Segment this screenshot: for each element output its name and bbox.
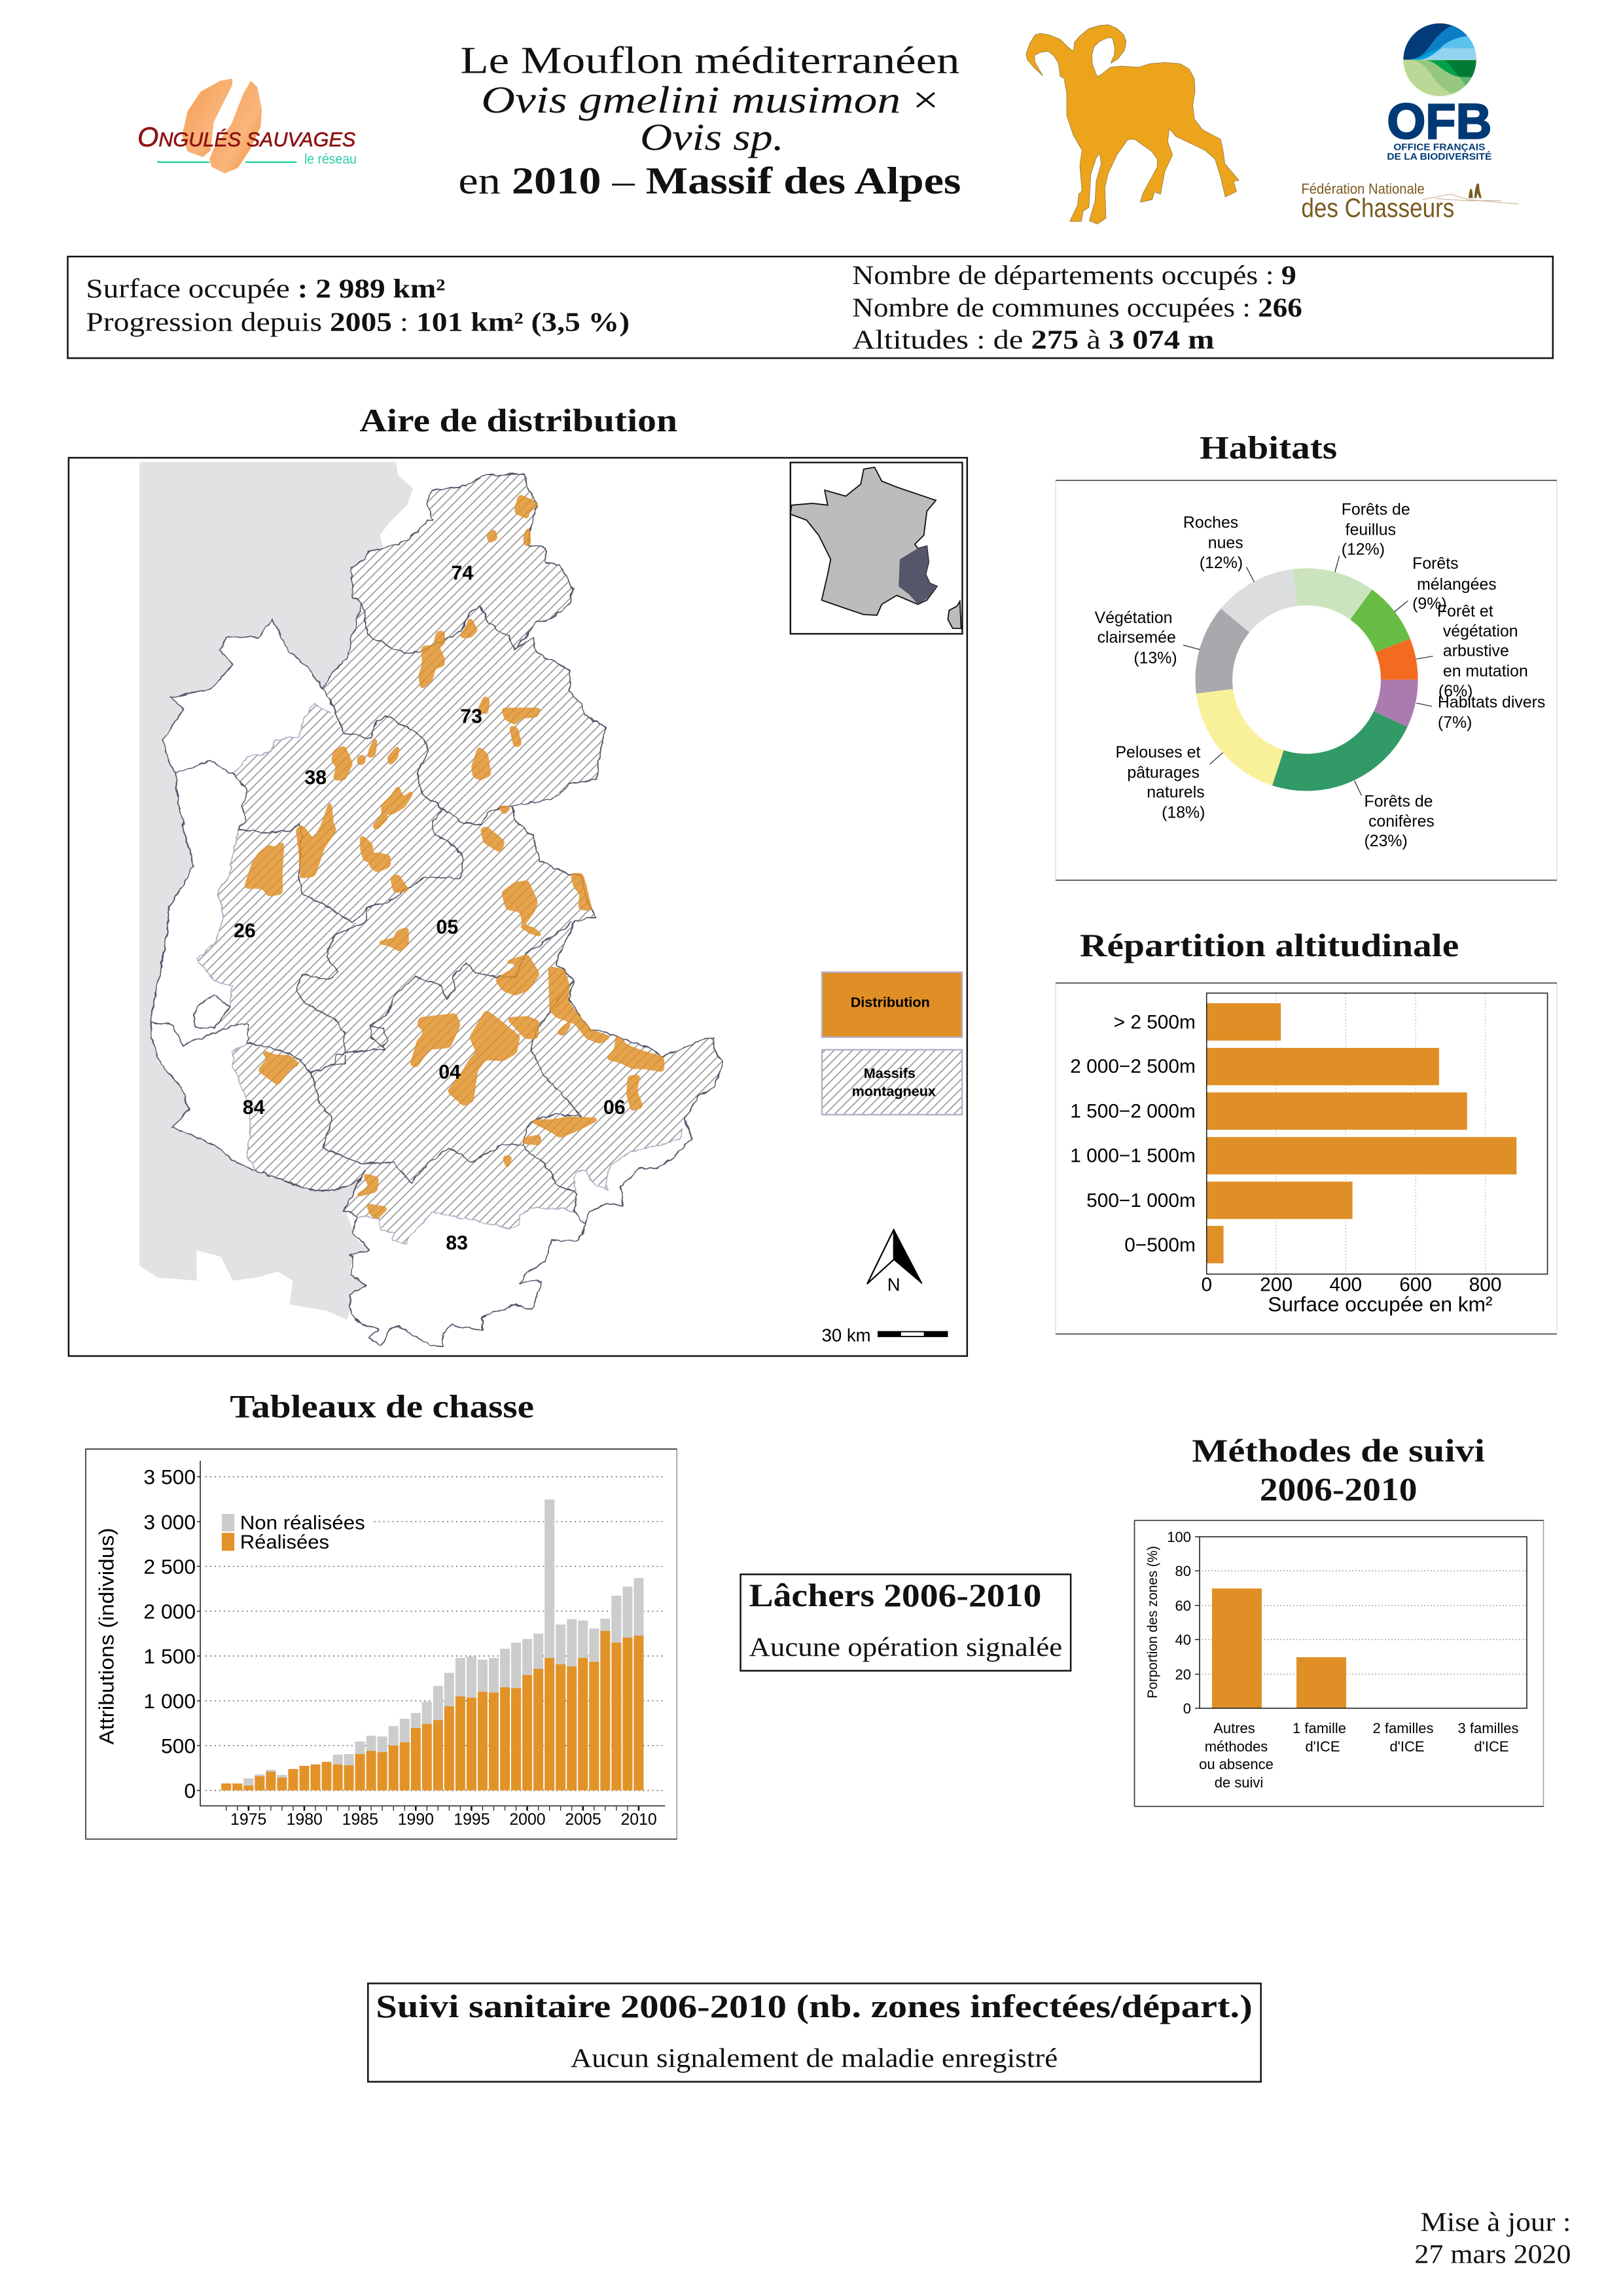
- heading: Méthodes de suivi: [1192, 1433, 1485, 1507]
- panel: key figures: Altitudes : de 275 à 3 074 m: [852, 325, 1215, 354]
- method y axis: 100: [1167, 1529, 1191, 1545]
- panel: key figures: Nombre de communes occupées : 266: [852, 293, 1302, 323]
- y axis labels: 2 000: [143, 1600, 196, 1623]
- logo: OFB: [1387, 22, 1492, 162]
- donut labels: (23%): [1364, 832, 1408, 850]
- donut labels: en mutation: [1443, 662, 1528, 680]
- donut labels: (7%): [1438, 713, 1472, 732]
- logo: Ongulés sauvages: le réseau: [304, 151, 357, 167]
- logo: OFB: DE LA BIODIVERSITÉ: [1387, 151, 1492, 162]
- donut labels: Pelouses et: [1115, 744, 1200, 762]
- y axis labels: 1 000: [143, 1689, 196, 1713]
- logo: Fédération Nationale des Chasseurs: Fédération Nationale: [1301, 181, 1425, 197]
- altitude class labels: 0−500m: [1124, 1234, 1196, 1256]
- footer: update date: Mise à jour :: [1421, 2208, 1571, 2237]
- y axis labels: 1 500: [143, 1645, 196, 1668]
- icon: north arrow: [867, 1230, 922, 1295]
- panel: Lâchers: [741, 1574, 1071, 1671]
- y axis labels: 3 000: [143, 1510, 196, 1534]
- altitude class labels: 1 500−2 000m: [1070, 1101, 1196, 1122]
- y axis labels: Attributions (individus): [95, 1528, 118, 1745]
- panel: habitats donut chart: [1056, 480, 1557, 880]
- legend: mountain massifs: montagneux: [852, 1083, 936, 1100]
- x axis labels: 2000: [509, 1810, 546, 1829]
- altitude axis labels: 800: [1469, 1274, 1501, 1296]
- icon: north arrow: N: [887, 1274, 901, 1295]
- legend: mountain massifs: Massifs: [864, 1065, 916, 1081]
- map: department numbers: 83: [446, 1232, 468, 1254]
- legend: distribution: [822, 972, 962, 1037]
- x axis labels: [230, 1810, 657, 1829]
- logo: Ongulés sauvages: [137, 79, 357, 173]
- method y axis: 20: [1175, 1666, 1191, 1683]
- map: department borders: [152, 474, 723, 1347]
- altitude class labels: > 2 500m: [1114, 1012, 1196, 1033]
- donut labels: (13%): [1133, 649, 1177, 667]
- method x labels: d'ICE: [1389, 1738, 1425, 1755]
- scale bar: 30 km: [822, 1325, 871, 1345]
- method y axis: 60: [1175, 1598, 1191, 1614]
- x axis labels: 1995: [454, 1810, 490, 1829]
- panel: Suivi sanitaire: Aucun signalement de maladie enregistré: [571, 2043, 1058, 2073]
- donut labels: arbustive: [1443, 642, 1509, 660]
- map inset: France: [791, 463, 962, 634]
- icon: mouflon silhouette: [1026, 25, 1239, 224]
- title: Ovis gmelini musimon ×: [481, 79, 939, 121]
- donut labels: végétation: [1443, 622, 1518, 641]
- panel: key figures: Surface occupée : 2 989 km²: [86, 274, 446, 304]
- donut labels: Roches: [1183, 514, 1238, 532]
- x axis labels: 1990: [398, 1810, 434, 1829]
- method y axis: 80: [1175, 1563, 1191, 1579]
- altitude axis labels: 600: [1399, 1274, 1432, 1296]
- altitude class labels: 1 000−1 500m: [1070, 1145, 1196, 1167]
- map: departments background: [152, 619, 723, 1347]
- donut labels: feuillus: [1346, 520, 1396, 539]
- map: distribution patches: [246, 496, 662, 1217]
- donut labels: Habitats divers: [1438, 693, 1545, 711]
- y axis labels: 3 500: [143, 1465, 196, 1489]
- donut labels: naturels: [1147, 783, 1205, 801]
- donut leader lines: [1183, 556, 1433, 795]
- panel: altitude bar chart: [1056, 983, 1557, 1334]
- map: neighbouring countries: [139, 462, 413, 1319]
- map: department numbers: 73: [460, 706, 482, 727]
- altitude axis labels: Surface occupée en km²: [1268, 1292, 1493, 1316]
- x axis labels: 1985: [342, 1810, 378, 1829]
- panel: key figures: Nombre de départements occupés : 9: [852, 260, 1296, 290]
- donut labels: conifères: [1368, 812, 1435, 831]
- heading: Aire de distribution: Aire de distribution: [359, 403, 677, 439]
- legend: distribution: Distribution: [851, 994, 930, 1011]
- donut labels: mélangées: [1417, 575, 1497, 594]
- map: department numbers: 26: [234, 920, 256, 942]
- donut labels: Végétation: [1095, 609, 1173, 627]
- panel: Lâchers: Aucune opération signalée: [749, 1632, 1062, 1662]
- method x labels: Autres: [1213, 1720, 1255, 1736]
- donut labels: nues: [1208, 533, 1243, 552]
- x axis labels: 1975: [230, 1810, 266, 1829]
- altitude class labels: 2 000−2 500m: [1070, 1056, 1196, 1077]
- donut labels: [1095, 501, 1545, 850]
- panel: key figures: [67, 257, 1553, 358]
- footer: update date: 27 mars 2020: [1415, 2239, 1571, 2269]
- y axis labels: 500: [161, 1734, 196, 1758]
- method x labels: méthodes: [1205, 1738, 1268, 1755]
- donut labels: Forêts de: [1342, 501, 1410, 519]
- x axis labels: 2010: [620, 1810, 657, 1829]
- y axis labels: 2 500: [143, 1555, 196, 1579]
- donut labels: (12%): [1200, 554, 1243, 572]
- donut labels: (9%): [1412, 594, 1447, 613]
- logo: OFB: OFB: [1387, 94, 1491, 149]
- method x labels: 2 familles: [1373, 1720, 1433, 1736]
- method x labels: ou absence: [1199, 1756, 1274, 1772]
- map: department numbers: 84: [243, 1097, 265, 1119]
- heading: Répartition altitudinale: Répartition altitudinale: [1080, 927, 1459, 963]
- altitude axis labels: 200: [1260, 1274, 1293, 1296]
- y axis labels: 0: [184, 1779, 196, 1803]
- method y axis: Porportion des zones (%): [1145, 1546, 1160, 1698]
- panel: hunting bag bar chart: [86, 1449, 677, 1839]
- bars: attributions realised: [221, 1631, 643, 1791]
- panel: Suivi sanitaire: Suivi sanitaire 2006-2010 (nb. zones infectées/départ.): [376, 1988, 1253, 2024]
- method x labels: 1 famille: [1293, 1720, 1346, 1736]
- donut segments: [1195, 568, 1418, 791]
- title: [458, 39, 961, 202]
- map: department numbers: 04: [438, 1062, 461, 1083]
- x axis labels: 1980: [287, 1810, 323, 1829]
- method y axis: [1145, 1529, 1191, 1717]
- chart legend: [205, 1508, 372, 1553]
- panel: Suivi sanitaire: [368, 1983, 1261, 2082]
- map: department numbers: 38: [304, 767, 327, 789]
- logo: Fédération Nationale des Chasseurs: des Chasseurs: [1301, 193, 1454, 223]
- logo: OFB: OFFICE FRANÇAIS: [1393, 142, 1486, 152]
- map: department numbers: 06: [603, 1097, 626, 1119]
- chart legend: Réalisées: [240, 1532, 329, 1553]
- x axis ticks: [226, 1806, 628, 1811]
- y axis labels: [95, 1465, 196, 1803]
- panel: key figures: Progression depuis 2005 : 101 km² (3,5 %): [86, 307, 630, 336]
- logo: Fédération Nationale des Chasseurs: [1301, 181, 1518, 223]
- x axis labels: 2005: [565, 1810, 601, 1829]
- title: en 2010 – Massif des Alpes: [458, 159, 961, 202]
- legend: mountain massifs: [822, 1050, 962, 1115]
- donut labels: (12%): [1342, 540, 1385, 558]
- altitude class labels: [1070, 1012, 1196, 1256]
- donut labels: Forêts: [1412, 554, 1459, 573]
- heading: Méthodes de suivi: 2006-2010: [1260, 1471, 1418, 1507]
- method x labels: d'ICE: [1305, 1738, 1340, 1755]
- method x labels: [1199, 1720, 1518, 1791]
- title: Ovis sp.: [640, 116, 784, 158]
- map: department numbers: 74: [451, 563, 473, 584]
- donut labels: Forêts de: [1364, 792, 1433, 810]
- panel: distribution map: [69, 457, 967, 1356]
- map: department numbers: 05: [437, 917, 458, 939]
- donut labels: clairsemée: [1097, 628, 1176, 647]
- altitude bars: [1207, 1003, 1516, 1263]
- method x labels: d'ICE: [1474, 1738, 1509, 1755]
- heading: Méthodes de suivi: Méthodes de suivi: [1192, 1433, 1485, 1469]
- map: massif edges: [196, 704, 682, 1244]
- logo: Ongulés sauvages: ONGULÉS SAUVAGES: [137, 121, 356, 152]
- title: Le Mouflon méditerranéen: [460, 39, 959, 81]
- donut labels: (6%): [1438, 682, 1472, 700]
- map: department numbers: [234, 563, 626, 1254]
- scale bar: [822, 1325, 948, 1345]
- method y axis: 0: [1183, 1700, 1191, 1717]
- heading: Habitats: Habitats: [1200, 430, 1337, 466]
- altitude axis labels: [1201, 1274, 1501, 1316]
- chart legend: Non réalisées: [240, 1512, 365, 1534]
- altitude axis labels: 0: [1201, 1274, 1212, 1296]
- altitude class labels: 500−1 000m: [1086, 1190, 1196, 1211]
- donut labels: pâturages: [1127, 764, 1200, 782]
- altitude axis labels: 400: [1329, 1274, 1362, 1296]
- donut labels: (18%): [1162, 803, 1205, 821]
- panel: Lâchers: Lâchers 2006-2010: [749, 1577, 1041, 1613]
- method bars: [1212, 1588, 1346, 1708]
- method x labels: de suivi: [1215, 1774, 1263, 1791]
- panel: monitoring methods bar chart: [1135, 1520, 1543, 1806]
- footer: update date: [1415, 2208, 1571, 2269]
- bars: attributions not realised: [221, 1499, 643, 1791]
- method x labels: 3 familles: [1458, 1720, 1518, 1736]
- donut labels: Forêt et: [1437, 602, 1493, 620]
- x axis major ticks: [249, 1806, 639, 1811]
- map: mountain massifs hatching: [196, 474, 723, 1244]
- heading: Tableaux de chasse: Tableaux de chasse: [230, 1389, 534, 1425]
- method y axis: 40: [1175, 1632, 1191, 1648]
